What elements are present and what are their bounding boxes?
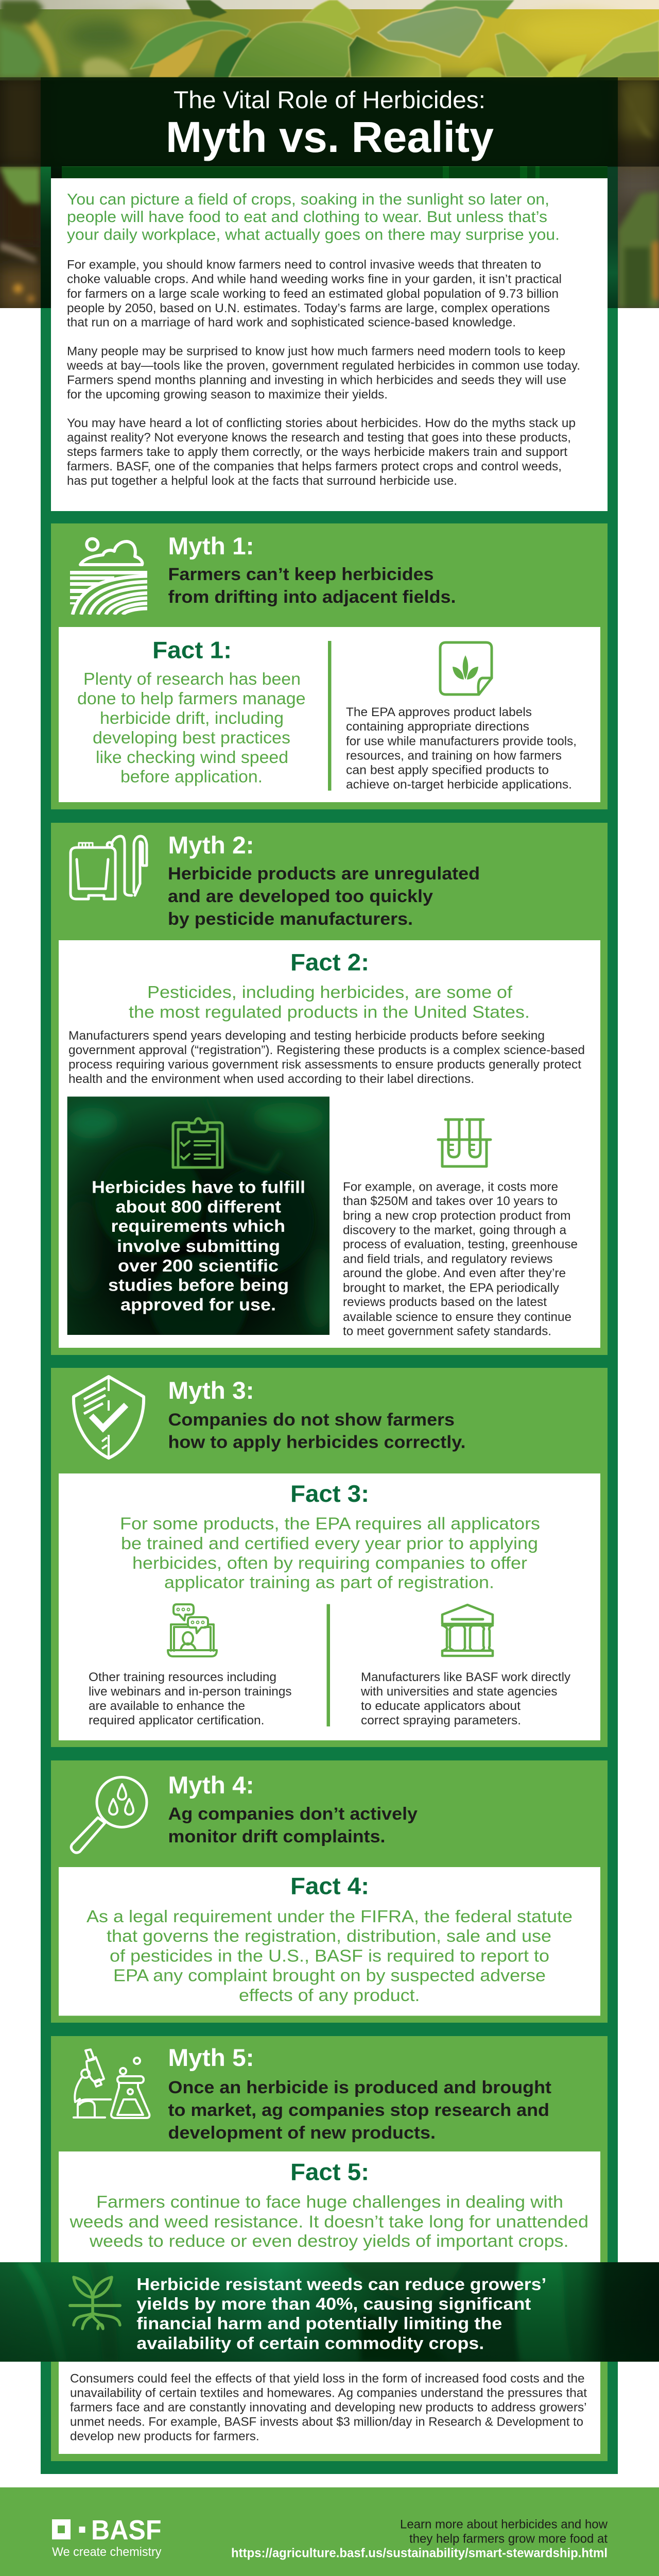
- panel: myth 1: [51, 523, 608, 809]
- fact 2 detail text: For example, on average, it costs more: [343, 1180, 558, 1194]
- icon: clipboard checklist: [173, 1118, 222, 1167]
- BASF logo: We create chemistry: [52, 2545, 162, 2559]
- footer call to action text: they help farmers grow more food at: [409, 2532, 608, 2546]
- fact 3 statement: [120, 1514, 540, 1592]
- fact 4 statement: [86, 1907, 573, 2005]
- intro paragraph 3: You may have heard a lot of conflicting stories about herbicides. How do the myths stack up: [67, 416, 576, 430]
- fact 3 left text: Other training resources including: [89, 1670, 276, 1684]
- fact 2 statement: the most regulated products in the United States.: [129, 1003, 530, 1021]
- fact 3 statement: applicator training as part of registration.: [164, 1573, 494, 1592]
- intro paragraph 3: farmers. BASF, one of the companies that helps farmers protect crops and control weeds,: [67, 460, 562, 473]
- myth 2 statement: by pesticide manufacturers.: [168, 909, 413, 929]
- callout text: involve submitting: [117, 1236, 280, 1256]
- fact 4 statement: effects of any product.: [239, 1986, 420, 2005]
- myth 5 statement: to market, ag companies stop research and: [168, 2100, 549, 2120]
- fact 1 heading: Fact 1:: [152, 637, 232, 664]
- fact 1 detail text: achieve on-target herbicide applications.: [346, 777, 572, 791]
- intro paragraph 1: that run on a marriage of hard work and sophisticated science-based knowledge.: [67, 315, 516, 329]
- fact 2 detail text: than $250M and takes over 10 years to: [343, 1194, 558, 1208]
- fact 3 left text: live webinars and in-person trainings: [89, 1685, 291, 1699]
- fact 5 card: [59, 2151, 600, 2454]
- fact 3 statement: herbicides, often by requiring companies to offer: [132, 1553, 527, 1572]
- myth 2 statement: and are developed too quickly: [168, 887, 433, 906]
- callout text: requirements which: [111, 1216, 285, 1235]
- intro paragraph 2: [66, 344, 580, 402]
- panel: introduction: [51, 178, 608, 511]
- icon: microscope and flask: [74, 2049, 149, 2118]
- fact 3 right text: to educate applicators about: [361, 1699, 521, 1713]
- intro paragraph 1: people by 2050, based on U.N. estimates. Today’s farms are large, complex operations: [67, 301, 550, 315]
- myth 1 heading: Myth 1:: [168, 532, 254, 560]
- fact 2 body text: [68, 1029, 585, 1086]
- fact 3 right text: correct spraying parameters.: [361, 1714, 521, 1727]
- fact 1 statement: Plenty of research has been: [83, 669, 301, 688]
- intro paragraph 3: against reality? Not everyone knows the research and testing that goes into these products,: [67, 431, 571, 445]
- icon: magnifier over droplets: [71, 1777, 147, 1853]
- fact 5 heading: Fact 5:: [290, 2159, 369, 2185]
- fact 2 detail text: discovery to the market, going through a: [343, 1223, 567, 1237]
- footer call to action text: https://agriculture.basf.us/sustainability/smart-stewardship.html: [231, 2546, 608, 2561]
- fact 3 left text: [89, 1670, 291, 1727]
- callout text: Herbicide resistant weeds can reduce growers’: [136, 2275, 546, 2294]
- callout text: availability of certain commodity crops.: [136, 2334, 484, 2353]
- fact 4 statement: EPA any complaint brought on by suspected adverse: [113, 1966, 546, 1985]
- fact 5 body text: farmers face and are constantly innovating and developing new products to address growers’: [70, 2401, 587, 2414]
- hero photo: soybean leaves in field: [0, 0, 659, 309]
- intro paragraph 1: choke valuable crops. And while hand weeding works fine in your garden, it isn’t practical: [67, 273, 562, 286]
- fact 3 statement: For some products, the EPA requires all applicators: [120, 1514, 540, 1533]
- fact 3 right text: Manufacturers like BASF work directly: [361, 1670, 570, 1684]
- title: The Vital Role of Herbicides:: [174, 86, 485, 113]
- intro paragraph 3: steps farmers take to apply them correctly, or the ways herbicide makers train and support: [67, 445, 567, 459]
- photo callout: 800 requirements: [67, 1096, 330, 1335]
- intro paragraph 2: for the upcoming growing season to maximize their yields.: [67, 388, 388, 402]
- myth 3 statement: Companies do not show farmers: [168, 1410, 455, 1430]
- fact 3 right text: [360, 1670, 570, 1727]
- title: [166, 86, 494, 161]
- fact 2 detail text: reviews products based on the latest: [343, 1295, 547, 1309]
- myth 2 statement: [168, 864, 480, 929]
- myth 2 statement: Herbicide products are unregulated: [168, 864, 480, 884]
- BASF logo: BASF: [91, 2515, 162, 2546]
- footer call to action text: [231, 2517, 608, 2561]
- fact 1 statement: before application.: [120, 767, 263, 786]
- callout text: about 800 different: [115, 1197, 281, 1216]
- fact 2 body text: health and the environment when used according to their label directions.: [68, 1072, 474, 1086]
- fact 2 detail text: [343, 1180, 578, 1338]
- panel: myth 4: [51, 1760, 608, 2023]
- title: Myth vs. Reality: [166, 113, 494, 161]
- fact 2 body text: Manufacturers spend years developing and testing herbicide products before seeking: [68, 1029, 545, 1043]
- fact 2 statement: [129, 982, 530, 1021]
- fact 5 body text: Consumers could feel the effects of that yield loss in the form of increased food costs and the: [70, 2372, 585, 2385]
- fact 5 body text: unmet needs. For example, BASF invests about $3 million/day in Research & Development to: [70, 2415, 583, 2429]
- fact 1 detail text: [346, 705, 577, 791]
- icon: university building: [442, 1605, 493, 1656]
- fact 4 statement: As a legal requirement under the FIFRA, the federal statute: [86, 1907, 573, 1926]
- callout text: [92, 1178, 305, 1314]
- fact 4 statement: of pesticides in the U.S., BASF is required to report to: [110, 1946, 549, 1965]
- fact 1 statement: like checking wind speed: [96, 748, 288, 767]
- fact 2 detail text: process of evaluation, testing, greenhouse: [343, 1238, 578, 1251]
- callout text: yields by more than 40%, causing significant: [136, 2294, 531, 2313]
- icon: laptop webinar with chat bubbles: [168, 1604, 217, 1656]
- fact 5 body text: unavailability of certain textiles and homewares. Ag companies understand the pressures that: [70, 2386, 587, 2400]
- myth 5 statement: [168, 2078, 551, 2143]
- icon: product label with plant: [440, 642, 492, 694]
- callout text: approved for use.: [120, 1295, 276, 1314]
- fact 2 body text: process requiring various government risk assessments to ensure products generally protect: [68, 1058, 581, 1072]
- fact 2 statement: Pesticides, including herbicides, are some of: [147, 982, 513, 1002]
- panel: myth 3: [51, 1368, 608, 1747]
- fact 4 heading: Fact 4:: [290, 1873, 369, 1900]
- fact 1 statement: [77, 669, 306, 786]
- callout text: Herbicides have to fulfill: [92, 1178, 305, 1197]
- icon: backpack sprayer: [71, 836, 147, 899]
- icon: sun, cloud and field: [70, 539, 147, 615]
- fact 2 detail text: bring a new crop protection product from: [343, 1209, 571, 1223]
- myth 1 statement: from drifting into adjacent fields.: [168, 587, 456, 607]
- fact 2 detail text: and field trials, and regulatory reviews: [343, 1252, 553, 1266]
- fact 3 statement: be trained and certified every year prior to applying: [121, 1534, 538, 1553]
- fact 2 detail text: brought to market, the EPA periodically: [343, 1281, 559, 1295]
- fact 5 statement: [69, 2192, 588, 2250]
- fact 3 right text: with universities and state agencies: [360, 1685, 557, 1699]
- fact 3 card: [59, 1473, 600, 1740]
- intro paragraph 2: Many people may be surprised to know just how much farmers need modern tools to keep: [67, 344, 565, 358]
- green frame background: [41, 308, 618, 2474]
- intro paragraph 3: [67, 416, 576, 488]
- intro paragraph 2: weeds at bay—tools like the proven, government regulated herbicides in common use today.: [66, 359, 580, 373]
- fact 5 statement: weeds and weed resistance. It doesn’t take long for unattended: [69, 2212, 588, 2231]
- myth 4 statement: Ag companies don’t actively: [168, 1804, 418, 1824]
- intro lead text: people will have food to eat and clothing to wear. But unless that’s: [67, 208, 547, 226]
- intro lead text: You can picture a field of crops, soaking in the sunlight so later on,: [67, 190, 549, 208]
- fact 1 statement: developing best practices: [93, 728, 290, 747]
- callout text: [136, 2275, 546, 2353]
- intro paragraph 2: Farmers spend months planning and investing in which herbicides and seeds they will use: [67, 373, 566, 387]
- myth 4 statement: monitor drift complaints.: [168, 1827, 385, 1846]
- myth 2 heading: Myth 2:: [168, 831, 254, 858]
- myth 5 statement: development of new products.: [168, 2123, 436, 2143]
- fact 2 heading: Fact 2:: [290, 949, 369, 976]
- fact 2 detail text: to meet government safety standards.: [343, 1324, 551, 1338]
- intro paragraph 1: For example, you should know farmers need to control invasive weeds that threaten to: [67, 258, 541, 272]
- myth 4 statement: [168, 1804, 418, 1846]
- fact 3 heading: Fact 3:: [290, 1480, 369, 1507]
- fact 1 detail text: The EPA approves product labels: [346, 705, 532, 719]
- panel: myth 2: [51, 823, 608, 1355]
- callout text: financial harm and potentially limiting the: [136, 2314, 502, 2333]
- fact 2 card: [59, 940, 600, 1352]
- myth 5 statement: Once an herbicide is produced and brought: [168, 2078, 551, 2097]
- fact 2 detail text: around the globe. And even after they’re: [343, 1266, 566, 1280]
- icon: shield with check: [74, 1377, 144, 1458]
- BASF logo: [52, 2515, 162, 2559]
- fact 1 detail text: can best apply specified products to: [346, 764, 549, 777]
- fact 2 detail text: available science to ensure they continue: [343, 1310, 571, 1324]
- fact 3 left text: are available to enhance the: [89, 1699, 245, 1713]
- callout text: studies before being: [108, 1276, 289, 1295]
- intro lead text: [67, 190, 560, 243]
- panel: myth 5: [51, 2036, 608, 2461]
- fact 1 card: [59, 627, 600, 802]
- icon: test tubes in rack: [438, 1120, 491, 1166]
- fact 1 detail text: for use while manufacturers provide tools,: [346, 735, 577, 749]
- fact 1 detail text: containing appropriate directions: [346, 720, 529, 734]
- fact 3 left text: required applicator certification.: [89, 1714, 265, 1727]
- fact 2 body text: government approval (“registration”). Registering these products is a complex science-based: [68, 1043, 585, 1057]
- icon: seedling with roots: [70, 2277, 120, 2329]
- callout text: over 200 scientific: [118, 1256, 279, 1275]
- footer call to action text: Learn more about herbicides and how: [400, 2517, 608, 2532]
- fact 5 statement: Farmers continue to face huge challenges in dealing with: [96, 2192, 563, 2211]
- fact 1 statement: done to help farmers manage: [77, 689, 306, 708]
- myth 1 statement: [168, 565, 456, 607]
- myth 3 heading: Myth 3:: [168, 1377, 254, 1404]
- footer: [0, 2487, 659, 2576]
- fact 1 statement: herbicide drift, including: [100, 708, 284, 727]
- fact 5 body text: [70, 2372, 587, 2443]
- intro paragraph 3: has put together a helpful look at the facts that surround herbicide use.: [67, 474, 457, 488]
- fact 1 detail text: resources, and training on how farmers: [346, 749, 562, 762]
- fact 4 statement: that governs the registration, distribution, sale and use: [107, 1926, 551, 1945]
- fact 5 statement: weeds to reduce or even destroy yields of important crops.: [89, 2231, 569, 2250]
- intro paragraph 1: for farmers on a large scale working to feed an estimated global population of 9.73 billion: [67, 287, 559, 301]
- myth 5 heading: Myth 5:: [168, 2044, 254, 2071]
- fact 4 card: [59, 1867, 600, 2015]
- myth 3 statement: how to apply herbicides correctly.: [168, 1433, 465, 1452]
- myth 4 heading: Myth 4:: [168, 1771, 254, 1799]
- fact 5 body text: develop new products for farmers.: [70, 2429, 259, 2443]
- myth 1 statement: Farmers can’t keep herbicides: [168, 565, 433, 584]
- callout band: herbicide resistant weeds: [0, 2262, 659, 2362]
- intro lead text: your daily workplace, what actually goes on there may surprise you.: [67, 226, 560, 243]
- myth 3 statement: [168, 1410, 465, 1452]
- intro paragraph 1: [67, 258, 562, 329]
